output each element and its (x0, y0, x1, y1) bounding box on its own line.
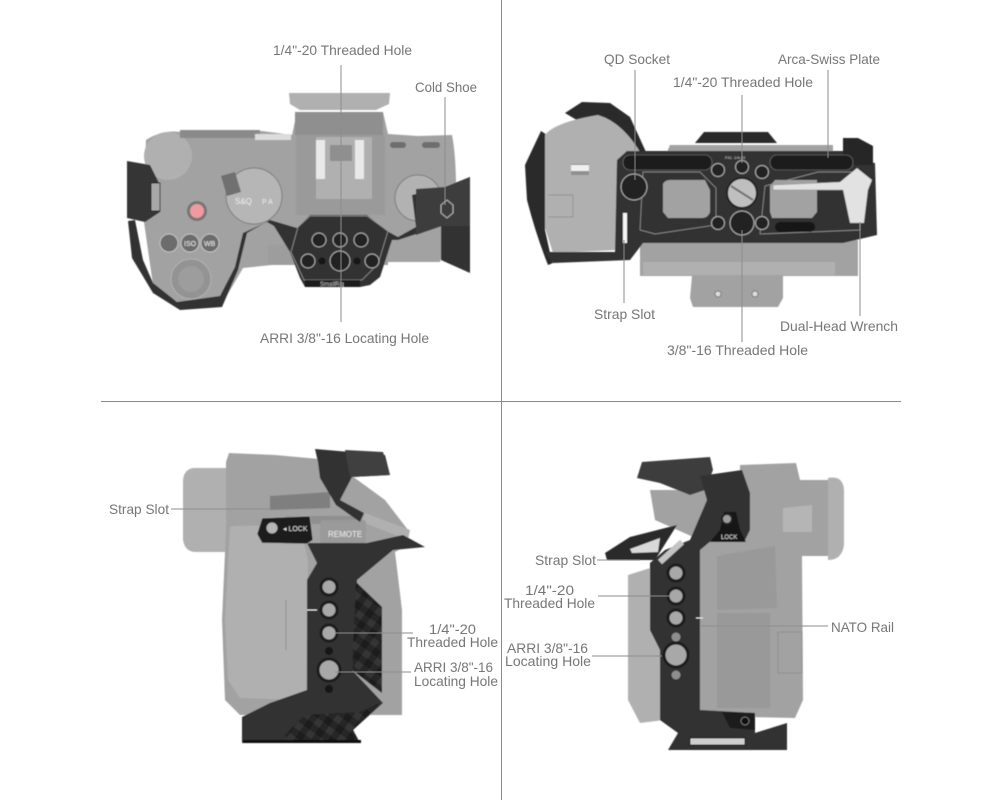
label: 1/4"-20 Threaded Hole: Threaded Hole (407, 634, 498, 650)
camera left side photo (183, 449, 425, 743)
label: Cold Shoe: Cold Shoe (415, 79, 477, 95)
label: QD Socket (604, 51, 670, 180)
label: Dual-Head Wrench (780, 222, 898, 334)
label: ARRI 3/8"-16 Locating Hole (505, 640, 662, 669)
camera top view photo: S&Q (235, 197, 252, 206)
camera top view photo: P A (262, 199, 273, 206)
panel: left side view of camera cage (109, 449, 498, 743)
panel: bottom view of camera cage (525, 51, 898, 358)
camera top view photo: WB (204, 241, 216, 248)
cage top plate silhouette (128, 177, 470, 310)
label: 1/4"-20 Threaded Hole: 1/4"-20 (429, 621, 476, 637)
camera left side photo: ◂ LOCK (283, 526, 308, 533)
label: Cold Shoe (415, 79, 477, 205)
label: Arca-Swiss Plate: Arca-Swiss Plate (778, 51, 880, 67)
camera top view photo (127, 93, 470, 310)
label: Strap Slot (535, 552, 640, 568)
camera left side photo: REMOTE (328, 530, 362, 539)
label: 1/4"-20 Threaded Hole: Threaded Hole (504, 595, 595, 611)
label: ARRI 3/8"-16 Locating Hole: ARRI 3/8"-16 (507, 640, 588, 656)
camera bottom view photo (525, 102, 877, 307)
label: 1/4"-20 Threaded Hole (335, 621, 498, 650)
label: ARRI 3/8"-16 Locating Hole: ARRI 3/8"-16 Locating Hole (260, 330, 429, 346)
label: Strap Slot: Strap Slot (535, 552, 596, 568)
camera top view photo: ISO (184, 241, 197, 248)
label: 1/4"-20 Threaded Hole: 1/4"-20 Threaded Hole (673, 74, 813, 90)
label: 1/4"-20 Threaded Hole: 1/4"-20 (525, 582, 574, 598)
label: Strap Slot: Strap Slot (109, 501, 169, 517)
label: ARRI 3/8"-16 Locating Hole (335, 659, 498, 689)
label: NATO Rail: NATO Rail (831, 619, 894, 635)
camera top view photo: SmallRig (320, 282, 344, 288)
label: Strap Slot (594, 240, 655, 322)
camera right side photo (605, 457, 844, 750)
label: Strap Slot: Strap Slot (594, 306, 655, 322)
label: ARRI 3/8"-16 Locating Hole: ARRI 3/8"-16 (414, 659, 493, 675)
label: 1/4"-20 Threaded Hole: 1/4"-20 Threaded Hole (273, 42, 412, 58)
camera bottom view photo: FIG. 1/4-20 (725, 155, 746, 160)
camera right side photo: LOCK (721, 535, 737, 541)
label: ARRI 3/8"-16 Locating Hole: Locating Hole (414, 673, 498, 689)
label: Dual-Head Wrench: Dual-Head Wrench (780, 318, 898, 334)
label: Arca-Swiss Plate (778, 51, 880, 158)
panel: right side view of camera cage (504, 457, 894, 750)
panel: top view of camera cage (127, 42, 477, 346)
label: 1/4"-20 Threaded Hole (504, 582, 670, 611)
label: ARRI 3/8"-16 Locating Hole: Locating Hole (505, 653, 591, 669)
label: 3/8"-16 Threaded Hole: 3/8"-16 Threaded Hole (667, 342, 808, 358)
label: QD Socket: QD Socket (604, 51, 670, 67)
